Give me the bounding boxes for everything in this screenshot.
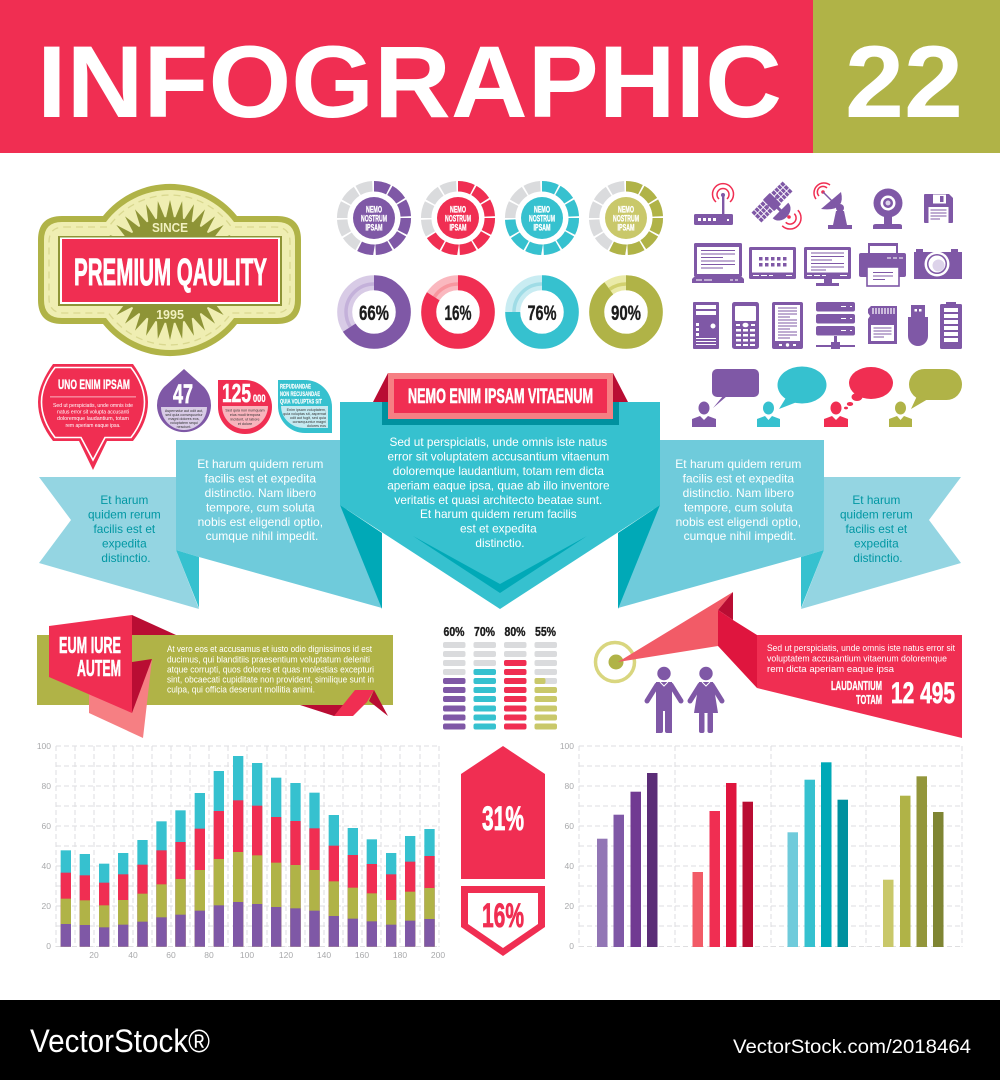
- chart: stacked bars: [37, 741, 445, 960]
- leaf badge: repudiandae: [278, 380, 332, 433]
- badge body text: quia voluptas sit, aspernat: [283, 412, 326, 416]
- badge body text: odit aut fugit, sed quia: [290, 416, 327, 420]
- icon: woman: [690, 667, 722, 733]
- centre panel heading: NEMO ENIM IPSAM VITAENUM: [408, 385, 593, 408]
- speech badge body: natus error sit volupta accusanti: [57, 410, 129, 416]
- ribbon: far left tail: facilis est et: [94, 522, 156, 536]
- callout: 31% arrow: 31%: [482, 800, 524, 838]
- ribbon: left panel: tempore, cum soluta: [206, 500, 315, 514]
- chart y axis labels: 0: [46, 941, 51, 951]
- chart y axis labels: 0: [569, 941, 574, 951]
- segmented donut: teal: NOSTRUM: [529, 214, 555, 224]
- chart y axis labels: [560, 741, 574, 951]
- panel: eum iure autem: [37, 615, 393, 738]
- ribbon: right panel: facilis est et expedita: [683, 472, 794, 486]
- ribbon: right panel: [618, 440, 824, 608]
- icon: man: [647, 667, 681, 733]
- ribbon: left panel: cumque nihil impedit.: [206, 529, 318, 543]
- segmented donut: purple: NOSTRUM: [361, 214, 387, 224]
- badge body text: Enim ipsam voluptatem,: [287, 408, 326, 412]
- badge text: since: SINCE: [152, 221, 188, 235]
- folded ribbon accent: [300, 690, 388, 716]
- meter labels: 55%: [535, 624, 556, 639]
- ribbon: far left tail: [39, 477, 199, 609]
- badge body text: dolores eos: [307, 424, 326, 428]
- icon: battery: [940, 302, 962, 349]
- panel text: culpa, qui officia deserunt mollitia animi.: [167, 684, 315, 694]
- badge heading: QUIA VOLUPTAS SIT: [280, 398, 322, 406]
- ribbon: far right tail: distinctio.: [853, 551, 903, 565]
- icon: mobile phone: [732, 302, 759, 349]
- donut 76%: [513, 283, 571, 341]
- footer logo: VectorStock®: [30, 1023, 210, 1059]
- icon: person with teal speech bubble: [757, 366, 826, 427]
- teal bars: [788, 762, 848, 947]
- segmented donut: red: [426, 186, 490, 250]
- chart y axis labels: 40: [565, 861, 574, 871]
- chart y axis labels: [37, 741, 51, 951]
- ribbon: left panel: distinctio. Nam libero: [205, 486, 316, 500]
- centre panel text: veritatis et quasi architecto beatae sunt.: [394, 493, 602, 507]
- icon: e-reader: [772, 302, 803, 349]
- panel number: 12 495: [891, 677, 955, 710]
- speech badge body: doloremque laudantium, totam: [57, 416, 129, 422]
- callout: 31% arrow: [461, 746, 545, 879]
- ribbon: far right tail: facilis est et: [846, 522, 908, 536]
- ribbon: right panel: cumque nihil impedit.: [684, 529, 796, 543]
- segmented donuts: [342, 186, 658, 250]
- segmented donut: green: IPSAM: [618, 222, 635, 234]
- ribbon: far left tail: Et harum: [100, 493, 148, 507]
- segmented donut: teal: IPSAM: [534, 222, 551, 234]
- callout: 16% arrow: [461, 886, 545, 956]
- chart x axis labels: 40: [128, 950, 138, 960]
- bar meters: [443, 624, 557, 730]
- chart x axis labels: 20: [89, 950, 99, 960]
- icon: usb stick: [908, 305, 928, 346]
- icon set: [692, 181, 962, 427]
- centre panel text: est et expedita: [460, 522, 537, 536]
- badge number: 125: [222, 378, 251, 408]
- drop number: 47: [173, 379, 193, 409]
- chart y axis labels: 40: [42, 861, 51, 871]
- title number: 22: [845, 25, 963, 139]
- ribbon: far left tail: distinctio.: [101, 551, 151, 565]
- panel text: ducimus, qui blanditiis praesentium voluptatum deleniti: [167, 654, 370, 664]
- badge text: year: 1995: [156, 308, 184, 322]
- badge body text: [225, 408, 265, 426]
- badge heading: [280, 384, 322, 406]
- icon: person with purple speech bubble: [692, 369, 759, 427]
- chart x axis labels: 140: [317, 950, 331, 960]
- speech badge heading: UNO ENIM IPSAM: [58, 376, 130, 392]
- segmented donut: red: IPSAM: [450, 222, 467, 234]
- panel: laudantium totam: [718, 592, 962, 738]
- chart: grouped bars: [560, 741, 962, 951]
- panel label: TOTAM: [856, 693, 882, 707]
- segmented donut: red: NEMO: [450, 204, 466, 216]
- badge: premium quality: [38, 184, 301, 356]
- chart grid: [56, 746, 439, 947]
- footer band: [0, 1000, 1000, 1080]
- round badge: 125 000: [218, 378, 272, 434]
- ribbon: right panel: Et harum quidem rerum: [675, 457, 801, 471]
- segmented donut: teal: [510, 186, 574, 250]
- segmented donut: purple: [342, 186, 406, 250]
- speech badge: uno enim ipsam: [38, 364, 148, 470]
- badge body text: Sed quia non numquam: [225, 408, 265, 412]
- target marker with beam: [596, 592, 733, 682]
- badge body text: et dolore: [238, 422, 252, 426]
- icon: floppy disk: [924, 194, 953, 223]
- panel text: Sed ut perspiciatis, unde omnis iste natus error sit: [767, 643, 956, 653]
- chart y axis labels: 20: [42, 901, 51, 911]
- icon: computer tower: [693, 302, 719, 349]
- percentage donuts: [345, 283, 655, 341]
- chart y axis labels: 60: [565, 821, 574, 831]
- badge body text: eius modi tempora: [230, 413, 261, 417]
- icon: server: [816, 302, 855, 349]
- donut 76%: 76%: [528, 302, 557, 325]
- ribbon: right panel: nobis est eligendi optio,: [676, 515, 801, 529]
- drop badge: 47: [157, 369, 211, 432]
- round badge: 125 000: 000: [253, 393, 266, 405]
- chart x axis labels: 100: [240, 950, 254, 960]
- chart x axis labels: [89, 950, 445, 960]
- chart x axis labels: 60: [166, 950, 176, 960]
- meter labels: 60%: [444, 624, 465, 639]
- ribbon: left panel: Et harum quidem rerum: [197, 457, 323, 471]
- chart x axis labels: 80: [204, 950, 214, 960]
- donut 66%: [345, 283, 403, 341]
- segmented donut: purple: NEMO: [366, 204, 382, 216]
- meter: 80%: [504, 642, 526, 730]
- icon: camera: [914, 249, 962, 279]
- badge body text: consequuntur magni: [293, 420, 326, 424]
- chart x axis labels: 200: [431, 950, 445, 960]
- chart y axis labels: 100: [560, 741, 574, 751]
- panel heading: EUM IURE: [59, 632, 121, 658]
- centre panel text: Et harum quidem rerum facilis: [420, 507, 577, 521]
- ribbon: far left tail: expedita: [102, 536, 147, 550]
- panel text: [767, 643, 956, 674]
- drop body text: sed quia consequuntur: [165, 413, 203, 417]
- donut 16%: 16%: [444, 302, 472, 325]
- icon: monitor: [804, 247, 851, 286]
- segmented donut: green: NEMO: [618, 204, 634, 216]
- speech badge body: rem aperiam eaque ipsa.: [66, 423, 121, 429]
- red bars: [692, 783, 753, 947]
- centre panel text: distinctio.: [475, 536, 525, 550]
- ribbon: right panel: distinctio. Nam libero: [683, 486, 794, 500]
- badge body text: incidunt, ut labore: [230, 418, 260, 422]
- icon: printer: [859, 243, 906, 286]
- icon: person with green speech bubble: [889, 369, 962, 427]
- footer url: VectorStock.com/2018464: [733, 1037, 971, 1058]
- drop body text: [165, 409, 203, 429]
- centre panel text: aperiam eaque ipsa, quae ab illo inventore: [387, 478, 610, 492]
- icon: satellite dish: [814, 183, 852, 229]
- ribbon: centre panel: [340, 373, 660, 609]
- badge body text: [283, 408, 327, 428]
- icon: tablet: [749, 247, 796, 279]
- centre panel text: doloremque laudantium, totam rem dicta: [393, 464, 604, 478]
- ribbon: far right tail: quidem rerum: [840, 508, 913, 522]
- speech badge body: Sed ut perspiciatis, unde omnis iste: [53, 403, 133, 409]
- panel label: [831, 679, 882, 707]
- donut 66%: 66%: [359, 302, 389, 325]
- chart x axis labels: 160: [355, 950, 369, 960]
- icon: satellite: [751, 181, 802, 232]
- panel heading: AUTEM: [77, 655, 121, 681]
- meter labels: 70%: [474, 624, 495, 639]
- icon: person with red thought bubble: [824, 367, 893, 427]
- segmented donut: green: NOSTRUM: [613, 214, 639, 224]
- chart x axis labels: 120: [279, 950, 293, 960]
- panel text: [167, 644, 374, 694]
- segmented donut: teal: NEMO: [534, 204, 550, 216]
- drop body text: Aspernatur aut odit aut,: [165, 409, 203, 413]
- ribbon: far left tail: quidem rerum: [88, 508, 161, 522]
- drop body text: voluptatem sequi: [170, 421, 198, 425]
- ribbon: far right tail: expedita: [854, 536, 899, 550]
- segmented donut: green: [594, 186, 658, 250]
- icon: memory card: [868, 306, 897, 344]
- callout: 16% arrow: 16%: [482, 897, 524, 935]
- badge heading: NON RECUSANDAE: [280, 391, 320, 398]
- segmented donut: purple: IPSAM: [366, 222, 383, 234]
- badge heading: REPUDIANDAE: [280, 384, 311, 390]
- meter labels: 80%: [504, 624, 526, 639]
- chart y axis labels: 100: [37, 741, 51, 751]
- chart y axis labels: 20: [565, 901, 574, 911]
- icon: router: [694, 184, 734, 225]
- ribbon: left panel: [176, 440, 382, 608]
- ribbon: left panel: facilis est et expedita: [205, 472, 316, 486]
- icon: webcam: [873, 188, 902, 229]
- icon: laptop: [692, 243, 744, 283]
- meter: 60%: [443, 642, 466, 730]
- badge text: premium quality: PREMIUM QAULITY: [74, 252, 267, 294]
- drop body text: nesciunt.: [177, 425, 191, 429]
- speech badge body: [53, 403, 133, 429]
- donut 16%: [429, 283, 487, 341]
- ribbon: far right tail: Et harum: [852, 493, 900, 507]
- panel text: voluptatem accusantium vitaenum doloremque: [767, 654, 947, 664]
- purple bars: [597, 773, 658, 947]
- chart x axis labels: 180: [393, 950, 407, 960]
- chart y axis labels: 80: [565, 781, 574, 791]
- panel text: At vero eos et accusamus et iusto odio dignissimos id est: [167, 644, 373, 654]
- stacked columns: [61, 756, 435, 947]
- chart y axis labels: 80: [42, 781, 51, 791]
- panel text: rem dicta aperiam eaque ipsa: [767, 664, 894, 674]
- segmented donut: red: NOSTRUM: [445, 214, 471, 224]
- panel text: sint, obcaecati cupiditate non provident, similique sunt in: [167, 674, 374, 684]
- centre panel text: Sed ut perspiciatis, unde omnis iste natus: [390, 435, 607, 449]
- meter: 70%: [474, 642, 496, 730]
- ribbon: left panel: nobis est eligendi optio,: [198, 515, 323, 529]
- panel label: LAUDANTIUM: [831, 679, 882, 693]
- centre panel text: error sit voluptatem accusantium vitaenum: [388, 450, 609, 464]
- donut 90%: [597, 283, 655, 341]
- green bars: [883, 776, 944, 947]
- chart y axis labels: 60: [42, 821, 51, 831]
- meter: 55%: [534, 642, 557, 730]
- donut 90%: 90%: [611, 302, 641, 325]
- ribbon: far right tail: [801, 477, 961, 609]
- panel text: atque corrupti, quos dolores et quas molestias excepturi: [167, 664, 374, 674]
- meter labels: [444, 624, 556, 639]
- title: INFOGRAPHIC: [37, 25, 782, 139]
- drop body text: magni dolores eos,: [168, 417, 200, 421]
- header band: [0, 0, 1000, 153]
- ribbon: right panel: tempore, cum soluta: [684, 500, 793, 514]
- chart grid: [579, 746, 962, 947]
